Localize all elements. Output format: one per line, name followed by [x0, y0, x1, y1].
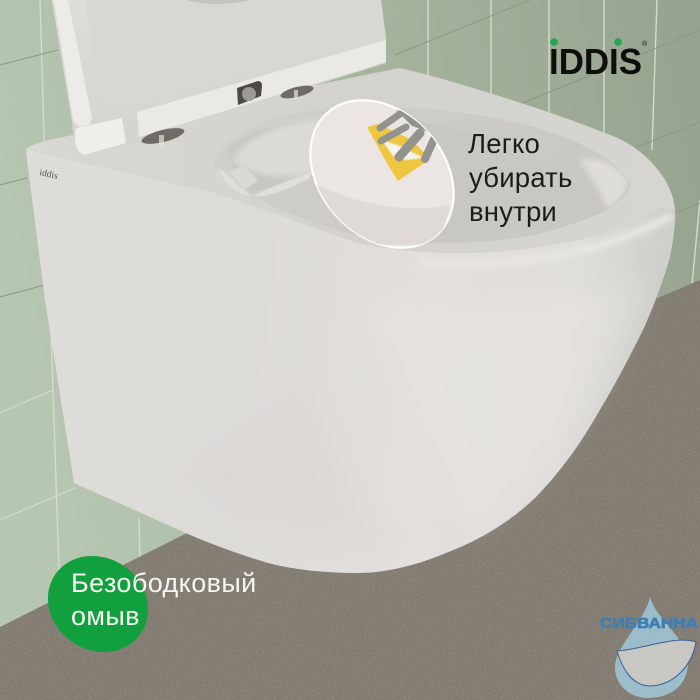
green blob	[29, 536, 167, 672]
text: easy to clean inside: убирать	[469, 162, 572, 193]
wordmark: СИБВАННА	[600, 615, 698, 632]
lid hollow	[186, 0, 250, 4]
glove palm	[396, 110, 428, 133]
foam	[382, 140, 424, 160]
lower body shade	[180, 370, 390, 552]
seat lid	[52, 0, 386, 155]
brand logo: ®	[642, 40, 648, 48]
flush ledge	[218, 168, 312, 196]
lid inner panel	[85, 0, 381, 106]
glove fingers	[380, 114, 435, 159]
close-up lower band	[316, 185, 450, 245]
rim front highlight	[420, 216, 672, 264]
text: rimless flush: Безободковый	[71, 568, 257, 598]
inner upper shelf	[232, 118, 345, 176]
toilet bowl	[213, 107, 631, 243]
brand logo: IDDIS	[549, 41, 642, 82]
seat foot left	[140, 125, 186, 147]
text: easy to clean inside: внутри	[469, 196, 557, 227]
floor	[0, 280, 700, 700]
hinge	[237, 81, 262, 105]
callout circle: cleaning close-up	[309, 99, 455, 249]
lower band	[137, 40, 386, 137]
hinge corner	[75, 118, 126, 155]
watermark	[600, 597, 698, 698]
text: easy to clean inside: Легко	[468, 128, 540, 159]
sponge	[367, 124, 430, 181]
rim flow highlight	[580, 159, 628, 208]
drop	[615, 597, 688, 698]
bowl inner	[228, 118, 600, 237]
seat foot right	[279, 83, 315, 101]
toilet body	[26, 68, 675, 573]
small logo on the toilet: iddis	[38, 168, 59, 182]
lid left edge	[54, 0, 92, 126]
flush opening	[228, 165, 258, 190]
bathtub	[617, 640, 696, 686]
rim top surface	[26, 68, 675, 253]
right body highlight	[370, 280, 640, 530]
text: rimless flush: омыв	[71, 601, 140, 631]
